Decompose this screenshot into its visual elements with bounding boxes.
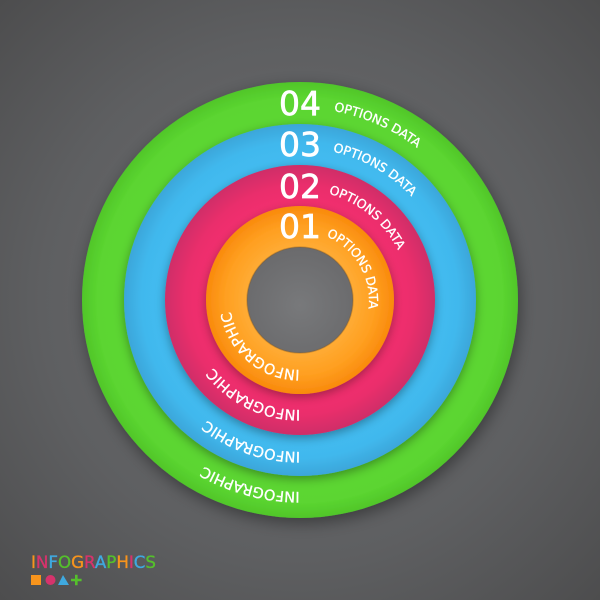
- ring 03: blue: [118, 122, 482, 484]
- center hole: [247, 247, 353, 353]
- label: infographic 04: INFOGRAPHIC: [200, 467, 298, 503]
- label: infographic 01: INFOGRAPHIC: [220, 312, 298, 381]
- ring 04: green: [78, 81, 526, 529]
- label: infographic 03: INFOGRAPHIC: [202, 421, 299, 463]
- label: options data 04: OPTIONS DATA: [335, 102, 420, 148]
- label: options data 01: OPTIONS DATA: [328, 229, 378, 309]
- ring 02: pink: [159, 162, 441, 444]
- ring 01: orange: [200, 203, 400, 403]
- number 02: 02: [279, 167, 321, 206]
- logo: [31, 553, 156, 585]
- number 03: 03: [279, 125, 321, 164]
- icon: square: [31, 575, 41, 585]
- icon: plus: [71, 575, 82, 585]
- logo wordmark: INFOGRAPHICS: [31, 553, 156, 572]
- icon: triangle: [58, 575, 69, 585]
- label: options data 02: OPTIONS DATA: [330, 186, 404, 250]
- label: infographic 02: INFOGRAPHIC: [206, 368, 299, 421]
- label: options data 03: OPTIONS DATA: [334, 143, 416, 197]
- number 01: 01: [279, 207, 321, 246]
- number 04: 04: [279, 84, 321, 123]
- icon: circle: [46, 575, 56, 585]
